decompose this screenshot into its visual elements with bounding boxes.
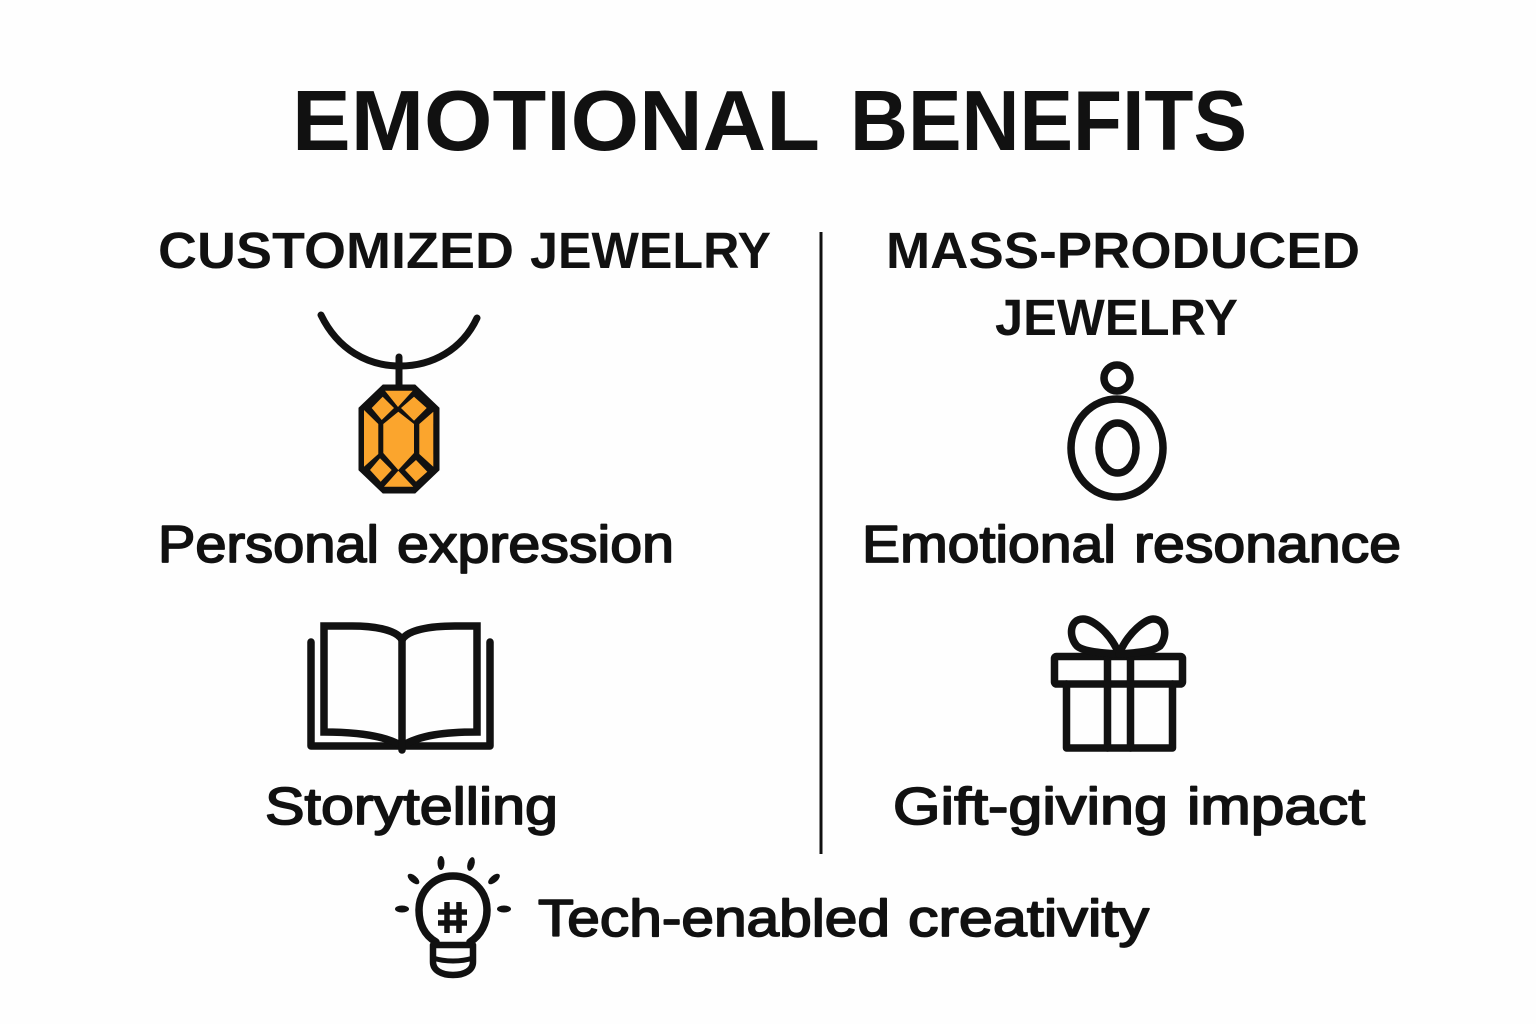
label: personal expression [158,516,674,574]
label: emotional resonance: Emotional [862,516,1116,574]
icon: open book [311,626,490,750]
label: emotional resonance: resonance [1134,516,1401,574]
heading: customized jewelry: CUSTOMIZED [158,222,514,279]
title: BENEFITS [850,74,1247,169]
label: personal expression: expression [397,516,674,574]
heading: mass-produced jewelry: JEWELRY [995,289,1238,346]
icon: ring pendant [1071,365,1163,497]
title [292,74,1247,169]
label: gift-giving impact [893,778,1366,836]
icon: gemstone necklace [321,315,477,493]
icon: gift box [1054,619,1182,748]
center divider [820,232,822,854]
label: storytelling: Storytelling [265,778,558,836]
label: gift-giving impact: impact [1187,778,1366,836]
heading: mass-produced jewelry: MASS-PRODUCED [886,222,1360,279]
label: emotional resonance [862,516,1401,574]
heading: mass-produced jewelry [886,222,1360,346]
label: tech-enabled creativity: creativity [908,890,1149,948]
heading: customized jewelry: JEWELRY [530,222,771,279]
title: EMOTIONAL [292,74,820,169]
label: tech-enabled creativity: Tech-enabled [538,890,890,948]
label: gift-giving impact: Gift-giving [893,778,1168,836]
label: personal expression: Personal [158,516,379,574]
icon: light bulb with hash [395,856,511,975]
label: tech-enabled creativity [538,890,1149,948]
heading: customized jewelry [158,222,771,279]
